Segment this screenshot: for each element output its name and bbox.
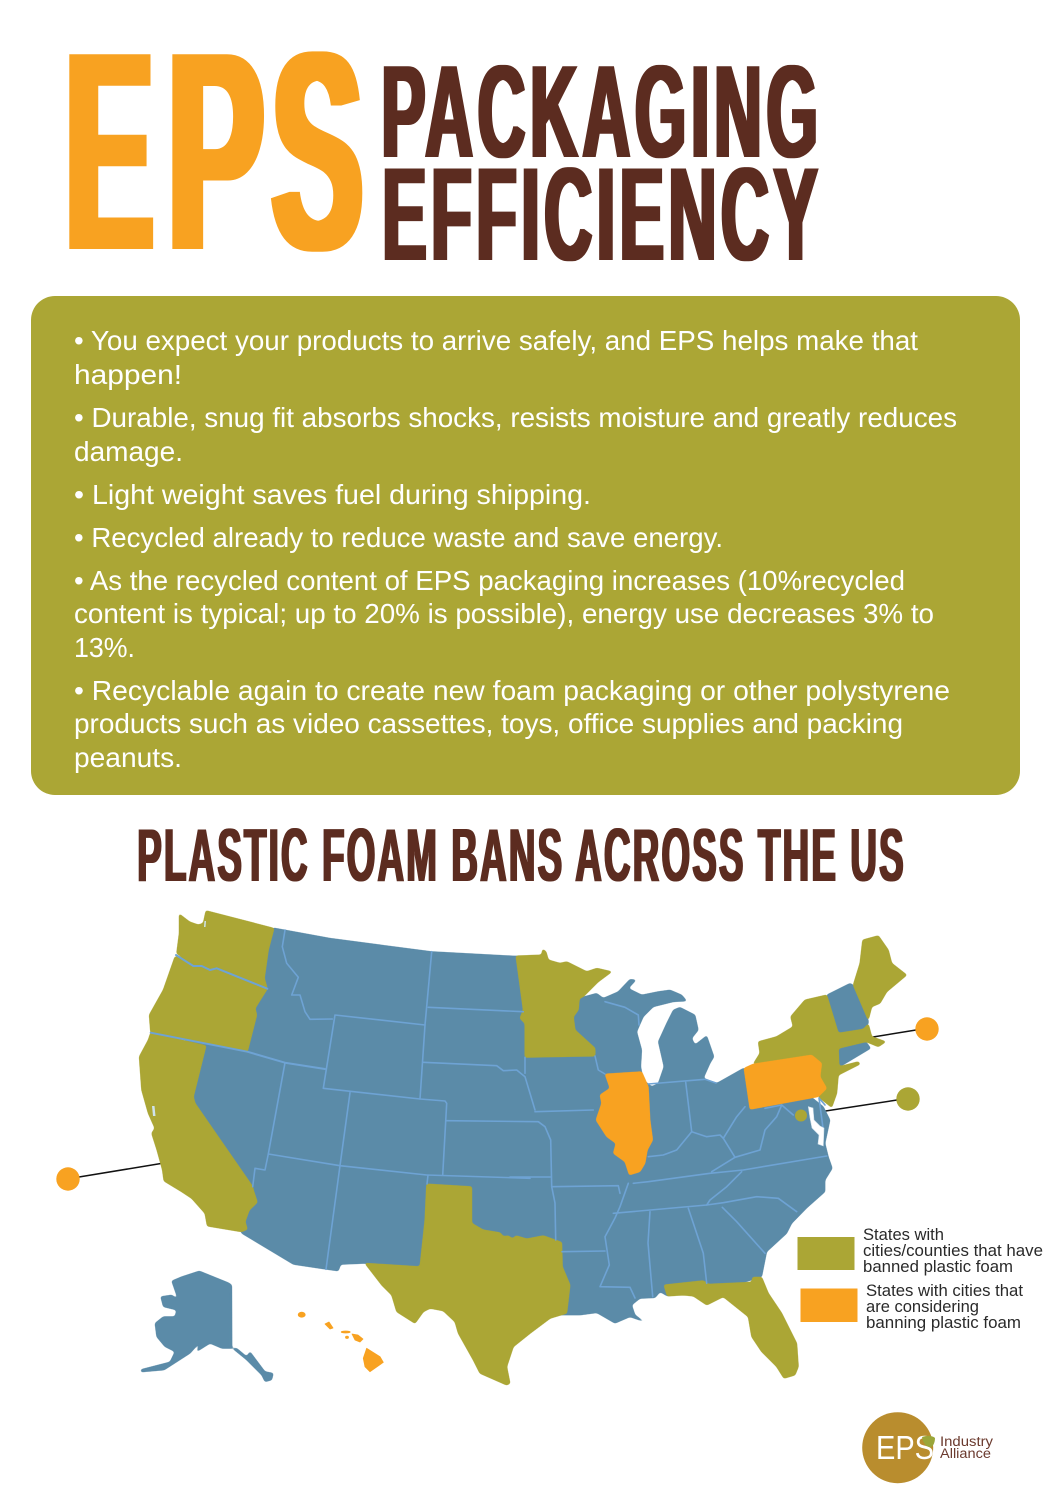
marker: Washington DC dot [795,1110,807,1122]
bullet list text: • Recyclable again to create new foam packaging or other polystyrene [74,675,950,706]
legend [798,1226,1043,1332]
legend text: banned: cities/counties that have [863,1242,1043,1260]
title line: PACKAGING: PACKAGING [381,39,818,186]
map: Florida [664,1277,798,1378]
title word: EPS [66,0,363,310]
bullet list text: • You expect your products to arrive safely, and EPS helps make that [74,325,918,356]
legend swatch: banned [798,1237,854,1270]
marker: Massachusetts callout [915,1017,939,1041]
heading: plastic foam bans: PLASTIC FOAM BANS ACROSS THE US [137,814,904,898]
icon: leaf [922,1436,935,1447]
bullet list text: happen! [74,359,182,390]
bullet list text: • Recycled already to reduce waste and save energy. [74,522,723,553]
map: Connecticut and Rhode Island [838,1042,871,1067]
bullet list text [74,325,957,773]
map: Oregon [149,957,267,1052]
legend text: banned: States with [863,1226,944,1244]
bullet list text: peanuts. [74,742,182,773]
title [66,0,818,310]
legend swatch: considering [800,1288,858,1322]
bullet list text: damage. [74,436,183,467]
logo: EPS Industry Alliance [862,1412,993,1483]
leader lines [79,1030,916,1177]
title line: EFFICIENCY: EFFICIENCY [382,141,818,289]
legend text: considering [866,1282,1023,1332]
legend text: banned [863,1226,1043,1276]
logo: EPS Industry Alliance: Industry [940,1434,993,1449]
map: Minnesota [516,949,612,1057]
legend text: considering: are considering [866,1298,979,1316]
title word: EPS: S [272,0,363,310]
map: New York, Massachusetts, New Jersey [753,995,886,1107]
map: Hawaii [298,1312,383,1372]
logo: EPS Industry Alliance: EPS [876,1429,934,1466]
legend text: considering: States with cities that [866,1282,1023,1300]
map: blue states mainland [175,928,832,1323]
map: Vermont and New Hampshire [827,983,868,1033]
title word: EPS: P [168,0,264,309]
title word: EPS: E [66,0,153,309]
state borders [151,930,827,1298]
logo: EPS Industry Alliance: Alliance [940,1446,991,1461]
bullet list text: • Durable, snug fit absorbs shocks, resists moisture and greatly reduces [74,402,957,433]
bullet list text: • As the recycled content of EPS packaging increases (10%recycled [74,565,905,596]
legend text: banned: banned plastic foam [863,1258,1013,1276]
marker: California callout [56,1167,80,1191]
bullet list text: content is typical; up to 20% is possible), energy use decreases 3% to [74,598,934,629]
bullet list text: 13%. [74,632,135,663]
map: Puget Sound and San Francisco Bay [152,921,206,1116]
map: Washington [177,911,274,989]
map: Alaska [141,1271,273,1382]
marker: DC callout [896,1087,920,1111]
bullet list text: products such as video cassettes, toys, office supplies and packing [74,708,903,739]
chart: US map [56,911,939,1385]
map: Pennsylvania [744,1055,827,1109]
map: California [139,1033,257,1232]
bullet list text: • Light weight saves fuel during shipping. [74,479,591,510]
legend text: considering: banning plastic foam [866,1314,1021,1332]
panel: EPS benefits [31,296,1020,795]
map: Texas [365,1184,570,1385]
map: Chesapeake Bay [808,1107,824,1146]
map: Illinois [596,1072,653,1175]
map: Maine [853,936,907,1020]
